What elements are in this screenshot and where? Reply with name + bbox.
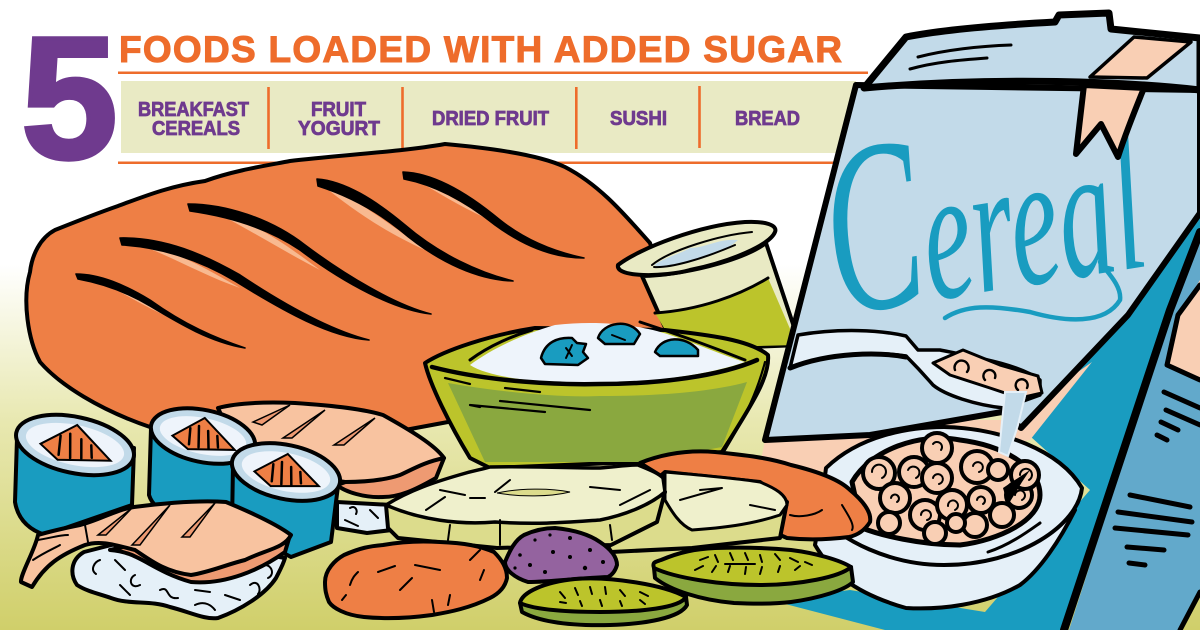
tape (1090, 37, 1191, 78)
illustration: yogurt cup (618, 222, 800, 350)
list item: breakfast cereals: BREAKFAST (138, 99, 249, 121)
illustration: dried fruit (325, 451, 870, 625)
milk drip (999, 392, 1026, 456)
illustration: cereal box (760, 13, 1200, 630)
sushi roll: middle (146, 400, 260, 515)
dried orange slice (325, 541, 507, 618)
kiwi slice: right (653, 548, 853, 604)
sushi roll: right (227, 434, 345, 557)
box side marks (1115, 392, 1200, 565)
illustration: bowl of cereal with spoon (790, 331, 1082, 608)
illustration: sushi (10, 400, 444, 618)
header (21, 0, 868, 195)
spoon (790, 331, 1040, 408)
list item: bread: BREAD (735, 108, 800, 130)
bowl body (815, 505, 1075, 608)
dried mango strip (640, 451, 870, 539)
list item: fruit yogurt: FRUIT (311, 99, 366, 121)
list item: dried fruit: DRIED FRUIT (432, 108, 549, 130)
label swoosh (945, 262, 1120, 319)
illustration: bread loaf (26, 144, 680, 430)
kiwi slice: bottom (520, 578, 687, 625)
box label: Cereal: Cereal (804, 52, 1160, 368)
sushi roll: left (10, 405, 140, 535)
back nigiri (218, 403, 444, 533)
box top flap (864, 13, 1200, 90)
box front (765, 85, 1200, 440)
pineapple ring: back (600, 472, 787, 552)
blueberries (541, 324, 698, 365)
flap marks (910, 45, 1011, 69)
cereal pile (852, 438, 1040, 545)
bowl rim (820, 427, 1082, 565)
list item: fruit yogurt: YOGURT (298, 118, 380, 140)
box light blue side panel (1069, 235, 1200, 630)
purple dried fruit (505, 528, 617, 582)
big number 5: 5 (21, 0, 118, 195)
list item: breakfast cereals: CEREALS (152, 118, 240, 140)
illustration: green bowl of yogurt (425, 322, 768, 468)
front nigiri (21, 501, 291, 618)
pineapple ring: front (386, 492, 665, 548)
spoonful of cereal (933, 350, 1042, 398)
box dark blue side (770, 213, 1200, 630)
list item: sushi: SUSHI (610, 108, 667, 130)
title: FOODS LOADED WITH ADDED SUGAR (119, 29, 842, 70)
box peach lower panel (760, 362, 1092, 475)
food list band (118, 72, 868, 164)
